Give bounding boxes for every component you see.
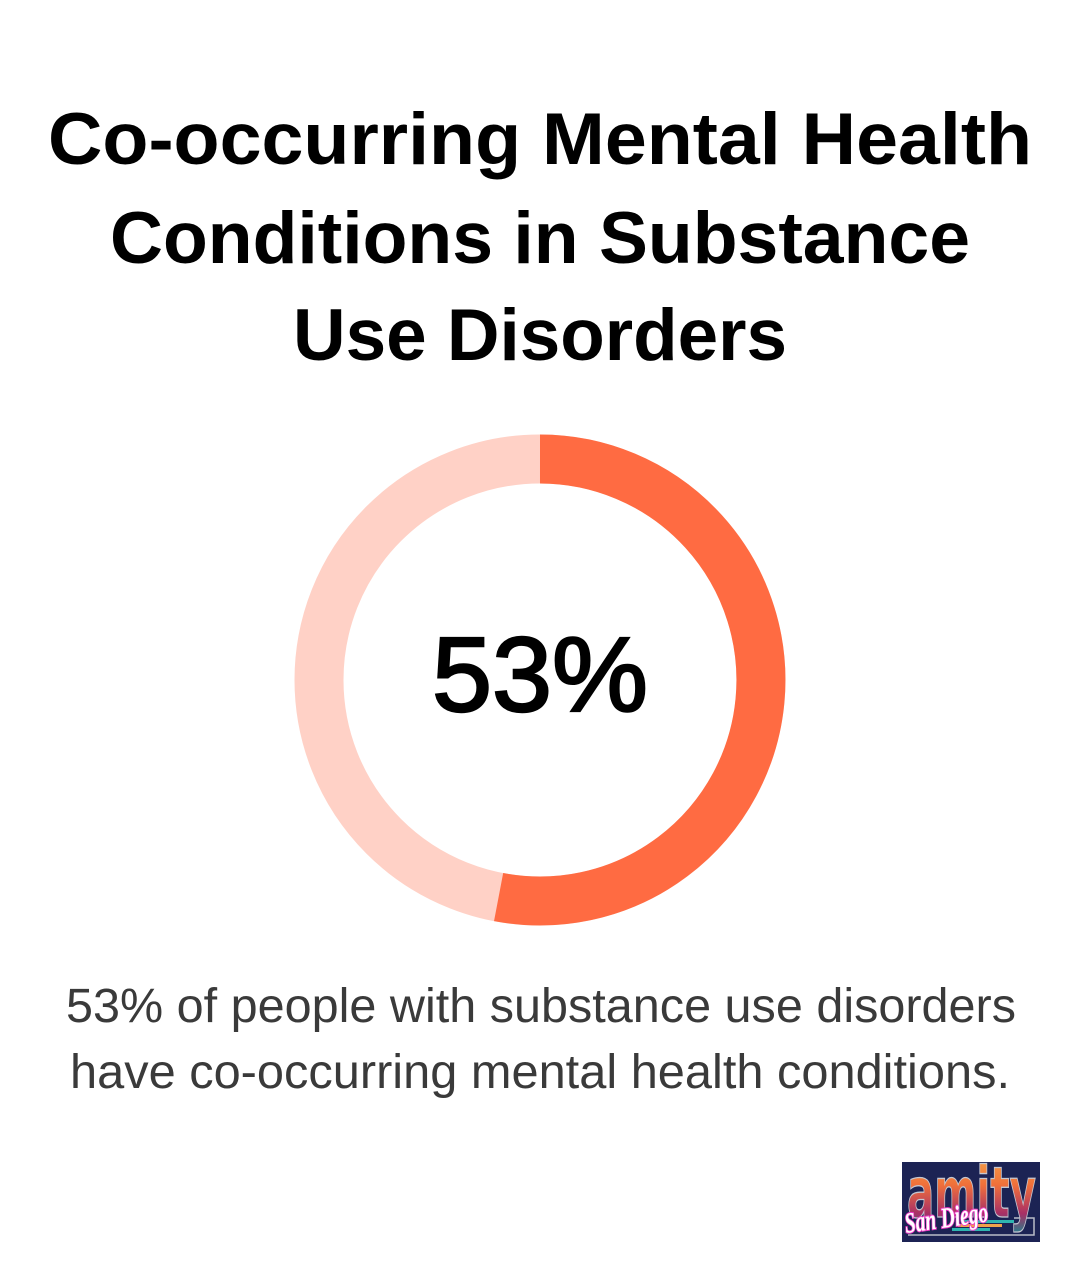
- donut centre value: 53%: [432, 616, 648, 734]
- logo frame lines: [908, 1218, 1034, 1235]
- title: Co-occurring Mental Health: [48, 99, 1032, 180]
- title: [48, 99, 1032, 376]
- logo background: [902, 1162, 1040, 1242]
- donut value arc: [499, 459, 761, 901]
- donut track: [319, 459, 761, 901]
- logo: amity San Diego: [902, 1152, 1040, 1242]
- donut chart: 53%: [319, 459, 761, 901]
- title: Conditions in Substance: [110, 198, 970, 279]
- logo beach stripes: [952, 1220, 1014, 1231]
- description text: 53% of people with substance use disorders: [66, 980, 1016, 1033]
- title: Use Disorders: [293, 295, 787, 376]
- description text: [66, 980, 1016, 1099]
- logo script: San Diego: [903, 1197, 990, 1240]
- description text: have co-occurring mental health conditions.: [70, 1046, 1010, 1099]
